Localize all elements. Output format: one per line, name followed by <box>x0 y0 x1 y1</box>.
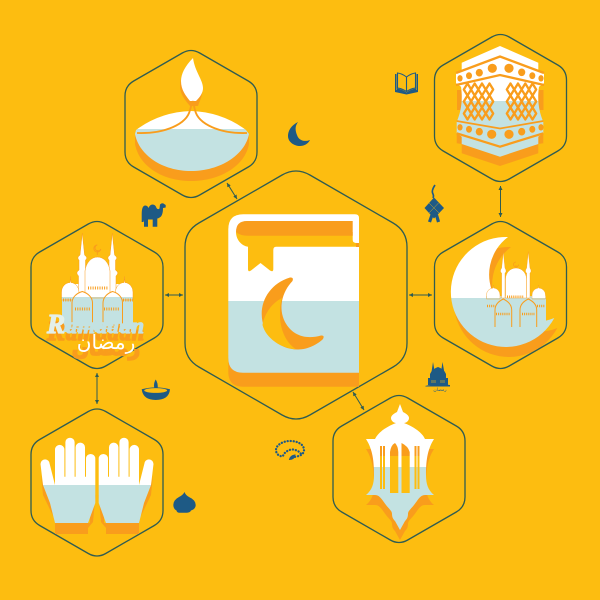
panel: kaaba lantern <box>434 34 566 182</box>
connector: lamp to centre <box>227 183 237 199</box>
panel: crescent mosque <box>434 222 566 368</box>
connector: ramadan mosque to hands <box>96 373 98 404</box>
panel: lantern <box>333 396 465 542</box>
icon: camel <box>142 203 166 227</box>
title: Ramadan shadow: Ramadan <box>46 316 144 346</box>
icon: small mosque: رمضان <box>433 388 447 393</box>
connector: centre to crescent mosque <box>409 294 432 296</box>
title: Ramadan: Ramadan <box>46 309 144 339</box>
icon: small mosque <box>425 362 450 393</box>
panel: central book hexagon <box>185 171 407 419</box>
icon: holy book <box>228 214 359 387</box>
icon: dome <box>173 492 196 513</box>
icon: small crescent <box>288 122 310 146</box>
icon: small oil lamp <box>142 380 170 400</box>
arabic caption: رمضان <box>77 330 135 354</box>
panel: praying hands <box>31 409 163 556</box>
icon: prayer beads <box>276 441 304 460</box>
icon: ketupat <box>424 185 444 222</box>
arabic caption shadow: رمضان <box>72 336 140 360</box>
panel: ramadan mosque <box>31 222 163 368</box>
connector: kaaba to crescent mosque <box>500 186 502 217</box>
icon: open book <box>395 73 418 94</box>
connector: centre to lantern <box>353 392 364 410</box>
panel: oil lamp <box>125 50 257 198</box>
connector: ramadan mosque to centre <box>165 294 183 296</box>
